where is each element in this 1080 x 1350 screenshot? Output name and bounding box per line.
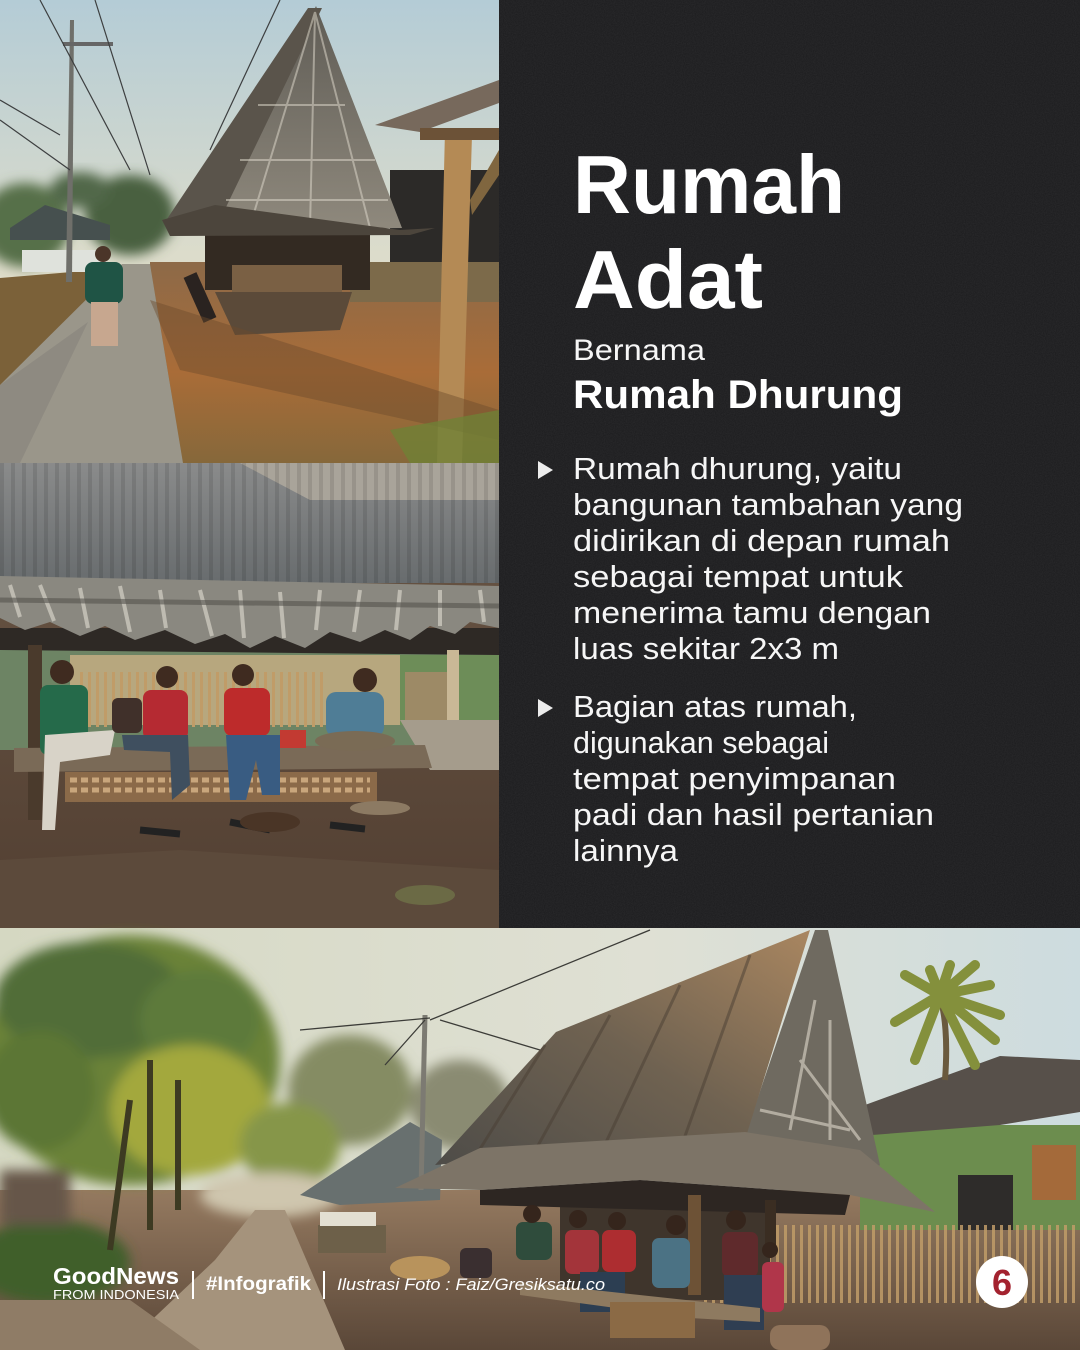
footer: logo GoodNews from Indonesia: GoodNews <box>53 1263 179 1289</box>
bullet point: rumah dhurung description: menerima tamu dengan <box>573 595 931 630</box>
footer: hashtag Infografik: #Infografik <box>206 1274 311 1295</box>
footer: logo GoodNews from Indonesia <box>53 1263 179 1302</box>
bullet point: rumah dhurung description: sebagai tempat untuk <box>573 559 904 594</box>
heading: Rumah Adat <box>573 138 845 326</box>
heading: Rumah Adat: Adat <box>573 233 763 326</box>
bullet point: upper part of the house: padi dan hasil pertanian <box>573 797 934 832</box>
footer: logo GoodNews from Indonesia: FROM INDONESIA <box>53 1287 179 1302</box>
subheading: Bernama Rumah Dhurung <box>573 334 903 417</box>
subheading: Bernama Rumah Dhurung: Bernama <box>573 334 705 367</box>
panel: dark title and text background <box>499 0 1080 928</box>
page number badge <box>976 1256 1028 1308</box>
bullet point: upper part of the house <box>538 689 934 868</box>
subheading: Bernama Rumah Dhurung: Rumah Dhurung <box>573 373 903 417</box>
bullet point: upper part of the house: tempat penyimpanan <box>573 761 896 796</box>
photo: village road with thatched shelter and seated men <box>0 928 1080 1350</box>
bullet point: rumah dhurung description: luas sekitar 2x3 m <box>573 631 839 666</box>
footer: photo credit: Ilustrasi Foto : Faiz/Gresiksatu.co <box>337 1275 605 1294</box>
bullet point: rumah dhurung description <box>538 451 963 666</box>
bullet point: upper part of the house: Bagian atas rumah, <box>573 689 857 724</box>
footer: hashtag Infografik <box>192 1271 311 1299</box>
bullet point: rumah dhurung description: bangunan tambahan yang <box>573 487 963 522</box>
bullet point: rumah dhurung description: didirikan di depan rumah <box>573 523 950 558</box>
photo: men seated under thatched shelter <box>0 463 499 928</box>
page number badge: 6 <box>992 1262 1012 1303</box>
photo: thatched house beside road <box>0 0 499 463</box>
heading: Rumah Adat: Rumah <box>573 138 845 231</box>
bullet point: rumah dhurung description: Rumah dhurung, yaitu <box>573 451 902 486</box>
bullet point: upper part of the house: digunakan sebagai <box>573 725 829 760</box>
bullet point: upper part of the house: lainnya <box>573 833 679 868</box>
